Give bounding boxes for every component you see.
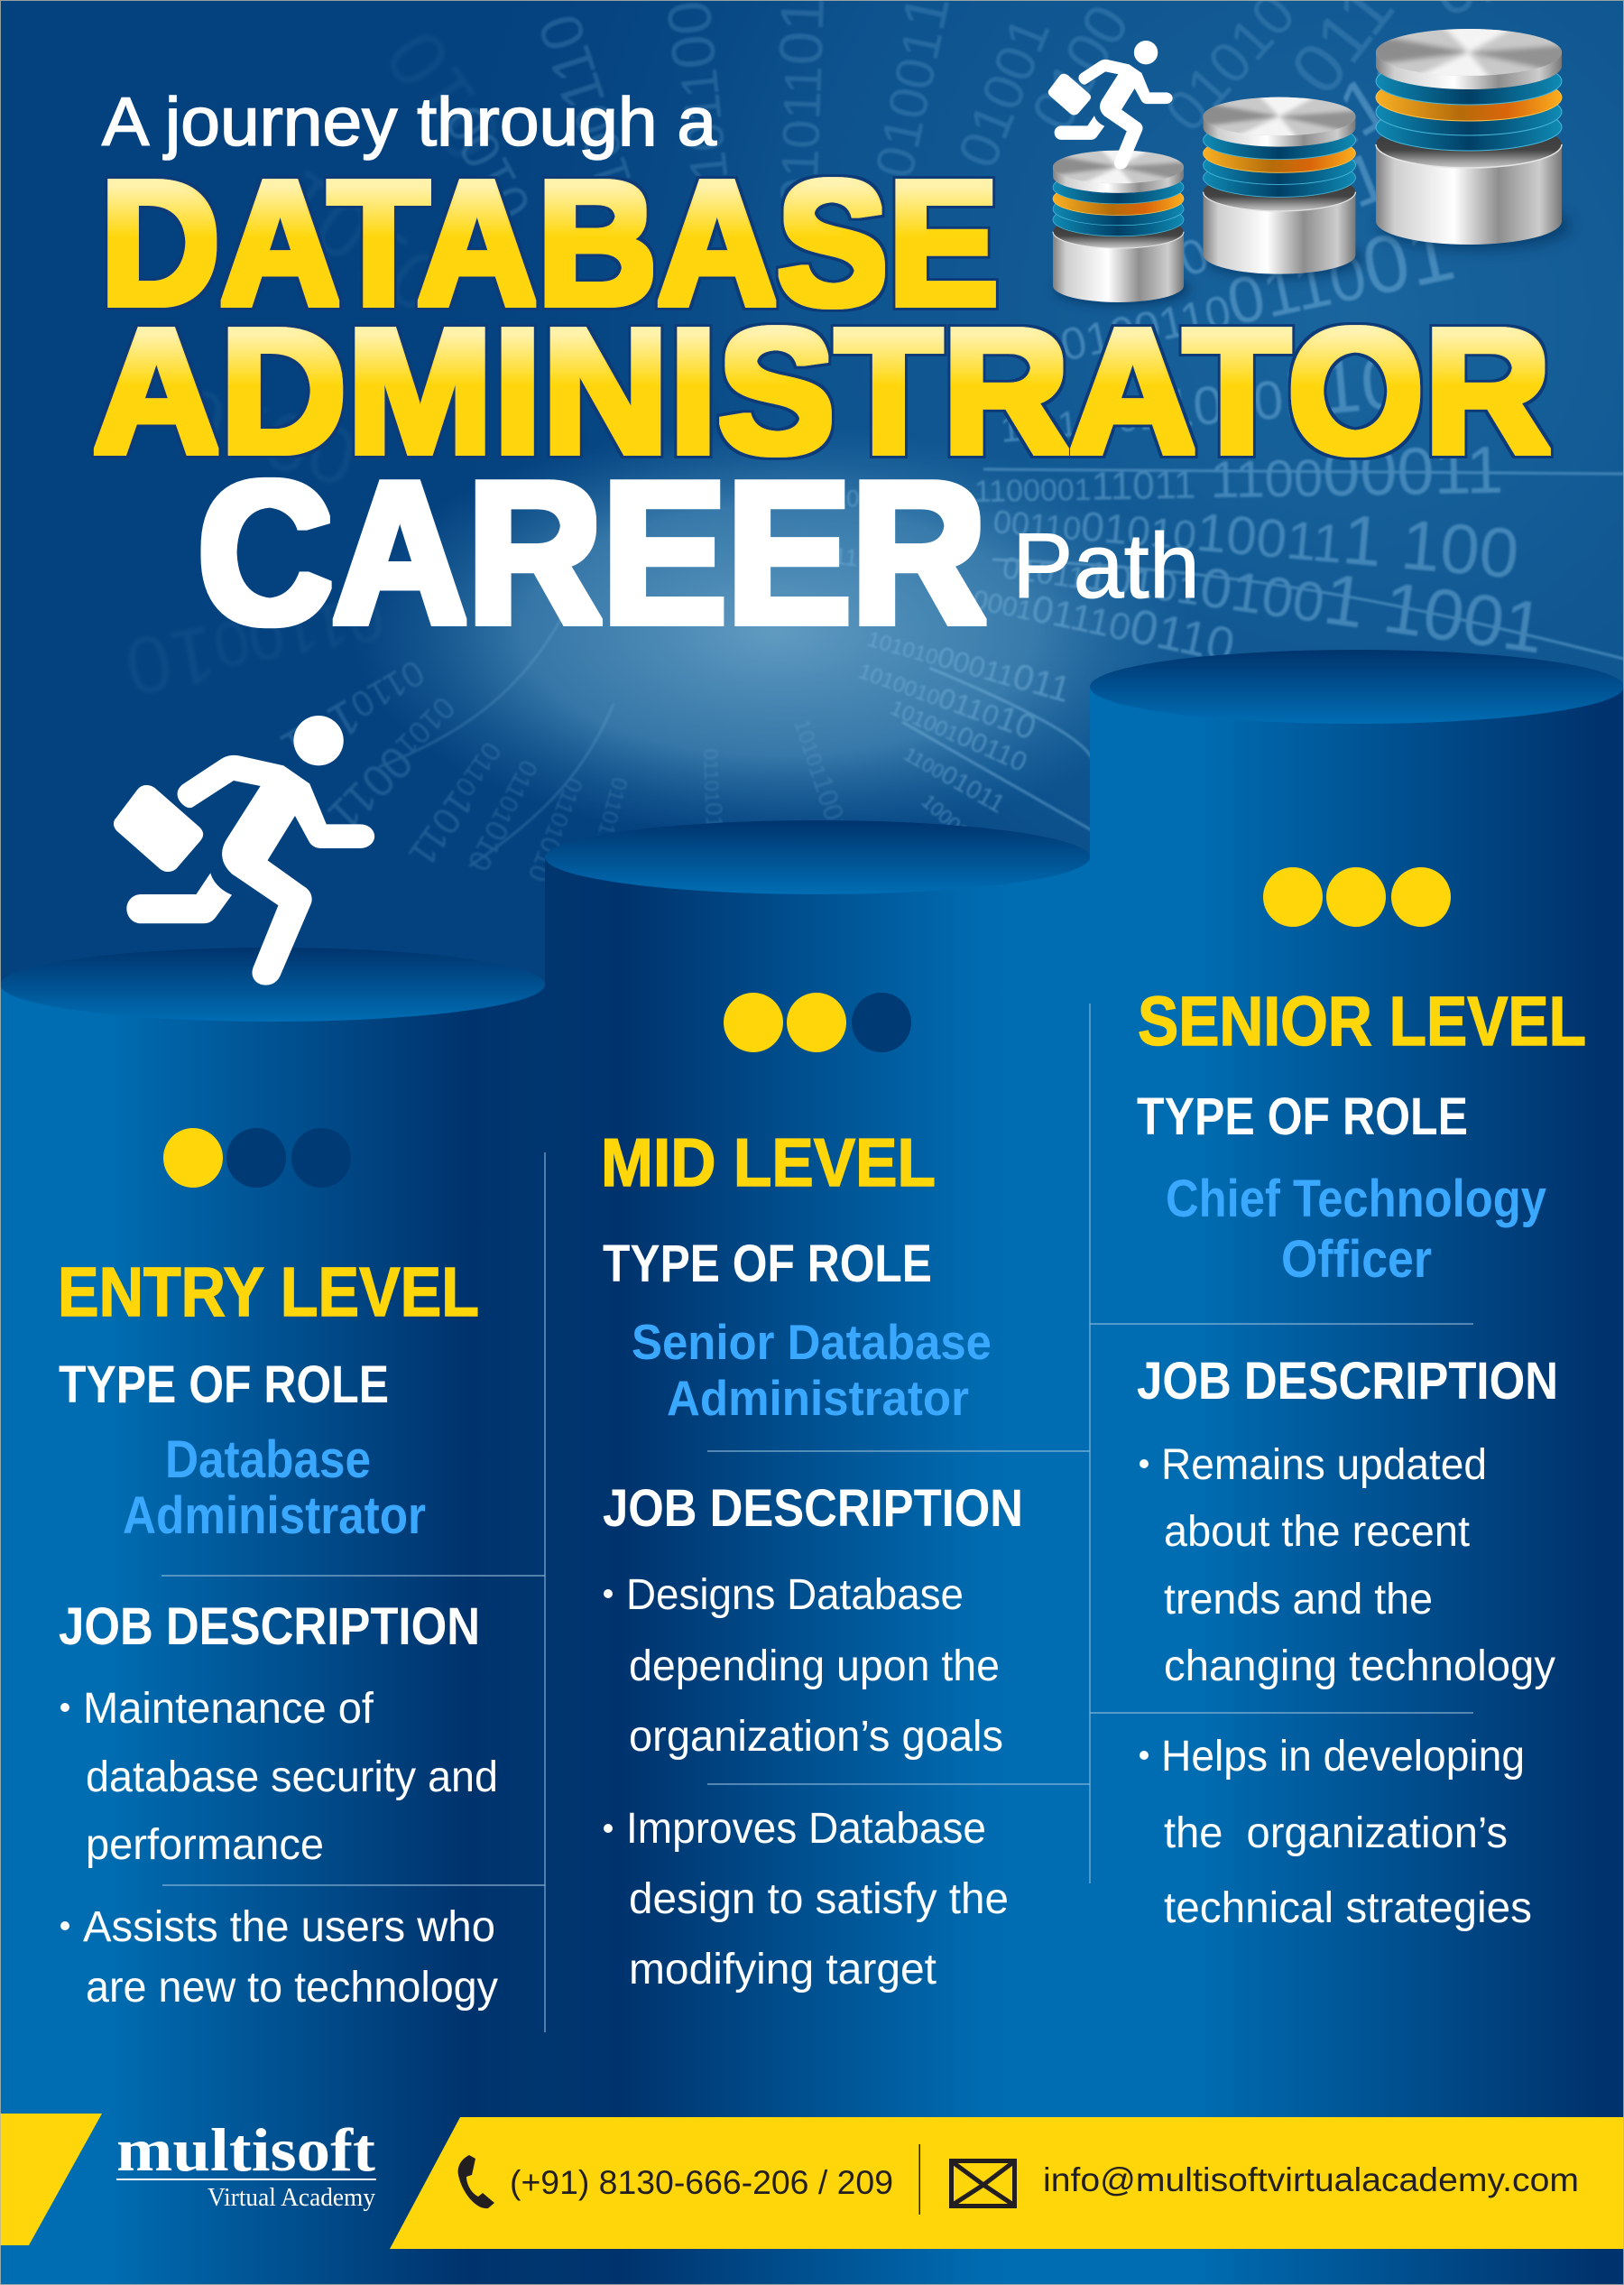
panel: mid level column (545, 820, 1090, 2285)
logo: multisoft Virtual Academy (116, 2115, 376, 2212)
background: binary tunnel: 110001011 (900, 738, 1010, 819)
background: binary tunnel: 01010011 (318, 688, 471, 840)
background: binary tunnel: 1011 (988, 856, 1037, 912)
panel: entry level column (0, 948, 545, 2285)
progress dots: two of three (724, 993, 911, 1052)
background: binary tunnel: 10011101 (1200, 14, 1476, 230)
panel: senior level column (1090, 650, 1624, 2285)
background: binary tunnel: 101011001 (788, 715, 854, 838)
job description bullets: trends and the (1164, 1576, 1433, 1624)
role name: Chief Technology (1166, 1170, 1546, 1228)
background: binary tunnel (132, 0, 1624, 881)
icon: large running man with briefcase (114, 716, 374, 985)
background: binary tunnel: 10011 (793, 538, 859, 571)
background: binary tunnel: 110000111011 110000011 (973, 432, 1504, 516)
job description bullets: performance (86, 1821, 324, 1869)
role name: Senior Database (632, 1314, 992, 1370)
heading: Path: Path (1012, 514, 1200, 617)
job description bullets: database security and (86, 1753, 498, 1801)
heading: entry level: ENTRY LEVEL (58, 1254, 479, 1331)
heading: type of role: TYPE OF ROLE (603, 1235, 932, 1293)
job description bullets: changing technology (1164, 1642, 1555, 1690)
background: binary tunnel: 1010010011010 (854, 649, 1040, 747)
dividers (161, 1004, 1473, 2032)
job description bullets: Designs Database (626, 1571, 964, 1619)
logo: multisoft Virtual Academy: multisoft (116, 2115, 375, 2184)
background: binary tunnel: 100010110 (917, 786, 1017, 881)
job description bullets: Helps in developing (1161, 1733, 1525, 1781)
logo: multisoft Virtual Academy: Virtual Academy (208, 2183, 375, 2212)
heading: job description: JOB DESCRIPTION (603, 1479, 1023, 1538)
icon: large database cylinder (1370, 25, 1570, 249)
progress dots: one of three (163, 1128, 351, 1188)
heading: job description: JOB DESCRIPTION (59, 1597, 480, 1656)
icon: small database cylinder (1048, 148, 1189, 305)
background: binary tunnel: 10001011100110 (955, 562, 1239, 673)
job description bullets: modifying target (629, 1946, 937, 1994)
icon: medium database cylinder (1198, 94, 1362, 278)
role name (632, 1314, 992, 1426)
background: binary tunnel: 0101 (262, 153, 461, 330)
heading: ADMINISTRATOR: ADMINISTRATOR (93, 292, 1551, 490)
footer (0, 2114, 1624, 2249)
role name: Administrator (667, 1370, 969, 1426)
background: binary tunnel: 10100100110 (886, 691, 1031, 778)
job description bullets (60, 1685, 498, 2012)
job description bullets: Maintenance of (83, 1685, 374, 1733)
background: binary tunnel: 0110010 (118, 578, 392, 712)
background: binary tunnel: 01001 (946, 9, 1063, 176)
job description bullets: Assists the users who (83, 1903, 495, 1951)
heading: type of role: TYPE OF ROLE (59, 1355, 389, 1414)
background: binary tunnel: 1001100011 (1112, 122, 1430, 312)
role name: Administrator (123, 1486, 426, 1545)
job description bullets: depending upon the (629, 1642, 1000, 1690)
job description bullets: technical strategies (1164, 1884, 1532, 1932)
background: binary tunnel: 0100110011001 (1049, 207, 1462, 379)
background: binary tunnel: 0011001010100111 100 (992, 468, 1522, 594)
title (93, 84, 1551, 666)
email address: info@multisoftvirtualacademy.com (1043, 2161, 1579, 2198)
background: binary tunnel: 011011001 (578, 774, 635, 893)
job description bullets: Remains updated (1161, 1441, 1487, 1489)
icon: phone (458, 2155, 494, 2208)
job description bullets: about the recent (1164, 1508, 1470, 1556)
job description bullets: organization’s goals (629, 1713, 1003, 1761)
role name: Database (165, 1430, 371, 1489)
background: binary tunnel: 10101000011011 (864, 615, 1075, 710)
heading: job description: JOB DESCRIPTION (1137, 1352, 1558, 1411)
background: binary tunnel: 0100110 (525, 6, 652, 225)
job description bullets: are new to technology (86, 1964, 498, 2012)
background: binary tunnel: 0100 (433, 96, 542, 230)
background: binary tunnel: 010 (368, 14, 520, 177)
background: binary tunnel: 101100011010110 (995, 338, 1407, 458)
entry level content (58, 1128, 498, 2012)
yellow accent left (0, 2114, 102, 2245)
job description bullets: design to satisfy the (629, 1875, 1009, 1923)
background: binary tunnel: 0010 (168, 369, 365, 503)
heading: intro line: A journey through a (102, 84, 717, 161)
role name (123, 1430, 426, 1545)
mid level content (601, 993, 1023, 1994)
background: binary tunnel: 010111010101001 1001 (1000, 513, 1549, 669)
icon: envelope (951, 2160, 1014, 2206)
background: binary tunnel: 01101010 (521, 773, 590, 885)
phone number: (+91) 8130-666-206 / 209 (510, 2164, 893, 2201)
icon: small running man with briefcase (1048, 41, 1173, 169)
role name: Officer (1281, 1230, 1432, 1289)
senior level content (1137, 867, 1586, 1932)
heading: type of role: TYPE OF ROLE (1137, 1087, 1468, 1146)
role name (1166, 1170, 1546, 1289)
background: binary tunnel: 01101011 (401, 735, 515, 874)
background: binary tunnel: 0110101 (272, 650, 437, 776)
heading: CAREER: CAREER (198, 439, 986, 666)
background: binary tunnel: 10010 (794, 484, 860, 512)
background: binary tunnel: 01101010 (461, 754, 547, 876)
contact bar (390, 2117, 1624, 2249)
job description bullets (604, 1571, 1009, 1994)
heading: mid level: MID LEVEL (601, 1124, 936, 1200)
job description bullets (1140, 1441, 1555, 1932)
job description bullets: the organization’s (1164, 1809, 1508, 1857)
job description bullets: Improves Database (626, 1805, 986, 1853)
background: binary tunnel: 01101 0110 (698, 748, 729, 854)
heading: DATABASE: DATABASE (100, 144, 999, 342)
progress dots: three of three (1263, 867, 1451, 927)
